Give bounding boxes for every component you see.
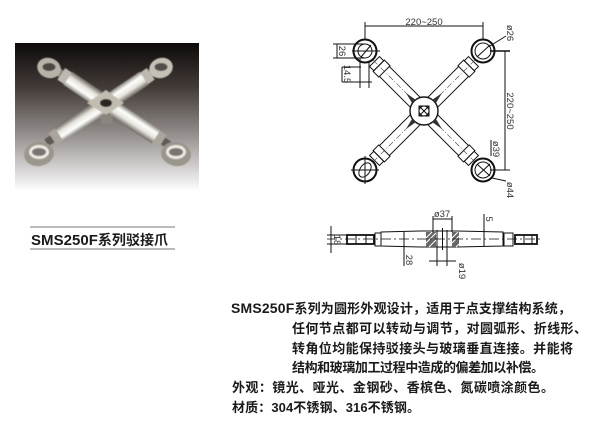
dimension: diameter 26: ø26 bbox=[504, 25, 515, 41]
dimension: height 220~250: 220~250 bbox=[504, 92, 515, 130]
hub bbox=[87, 90, 124, 115]
arms of the spider bbox=[359, 46, 489, 176]
dimension: 28: 28 bbox=[403, 255, 414, 265]
ring: bottom left bbox=[351, 156, 379, 184]
side view technical drawing bbox=[327, 209, 540, 279]
ring: bottom left bbox=[22, 140, 56, 168]
dimension: 18: 18 bbox=[331, 235, 342, 245]
top view technical drawing bbox=[333, 17, 515, 198]
dimension: height 220~250 bbox=[490, 51, 515, 170]
dimension: diameter 26 bbox=[490, 25, 515, 46]
dimension: 5: 5 bbox=[483, 216, 494, 222]
dimension: diameter 44: ø44 bbox=[504, 182, 515, 198]
dimension: 5 bbox=[483, 214, 494, 246]
dimension: 18 bbox=[327, 226, 347, 253]
ring: top left bbox=[352, 40, 380, 62]
product photo: spider fitting on gradient background bbox=[15, 43, 199, 191]
appearance line: 外观：镜光、哑光、金钢砂、香槟色、氮碳喷涂颜色。 bbox=[232, 380, 554, 395]
ring: bottom right bbox=[159, 140, 193, 168]
dimension: diameter 19: ø19 bbox=[456, 263, 467, 279]
description line 2: 任何节点都可以转动与调节，对圆弧形、折线形、 bbox=[292, 321, 587, 336]
dimension: 14.5: 14.5 bbox=[341, 65, 352, 83]
body of the arm bbox=[381, 231, 503, 247]
dimension: 14.5 bbox=[341, 58, 372, 88]
ring: top left bbox=[34, 54, 64, 82]
description line 3: 转角位均能保持驳接头与玻璃垂直连接。并能将 bbox=[292, 341, 573, 356]
dimension: diameter 37 bbox=[433, 209, 452, 232]
centre line bbox=[327, 238, 540, 240]
ring: top right bbox=[146, 54, 176, 82]
left end fitting bbox=[347, 233, 381, 246]
dimension: diameter 44 bbox=[492, 178, 515, 198]
hatched section right bbox=[452, 232, 459, 247]
material line: 材质：304不锈钢、316不锈钢。 bbox=[232, 400, 420, 415]
central hub bbox=[406, 93, 442, 129]
description line 1: SMS250F系列为圆形外观设计，适用于点支撑结构系统， bbox=[231, 300, 571, 316]
dimension: diameter 39: ø39 bbox=[490, 141, 501, 157]
hatched section left bbox=[426, 232, 436, 247]
arm: bottom right bbox=[102, 97, 173, 152]
dimension: width 220~250 bbox=[365, 17, 483, 40]
description line 4: 结构和玻璃加工过程中造成的偏差加以补偿。 bbox=[292, 360, 544, 375]
dimension: 26 bbox=[333, 44, 365, 58]
right end fitting bbox=[504, 233, 537, 246]
arm: top right bbox=[102, 63, 162, 111]
dimension: 28 bbox=[403, 232, 414, 266]
dimension: diameter 37: ø37 bbox=[434, 209, 450, 220]
ring: bottom right bbox=[472, 158, 494, 182]
arm: bottom left bbox=[42, 97, 110, 149]
dimension: width 220~250: 220~250 bbox=[405, 17, 443, 28]
product title with rules: SMS250F系列驳接爪 bbox=[31, 232, 168, 249]
dimension: 26: 26 bbox=[336, 46, 347, 56]
ring: top right bbox=[472, 40, 494, 62]
arm: top left bbox=[50, 63, 110, 111]
product description text bbox=[231, 300, 587, 415]
dimension: diameter 19 bbox=[429, 228, 467, 279]
